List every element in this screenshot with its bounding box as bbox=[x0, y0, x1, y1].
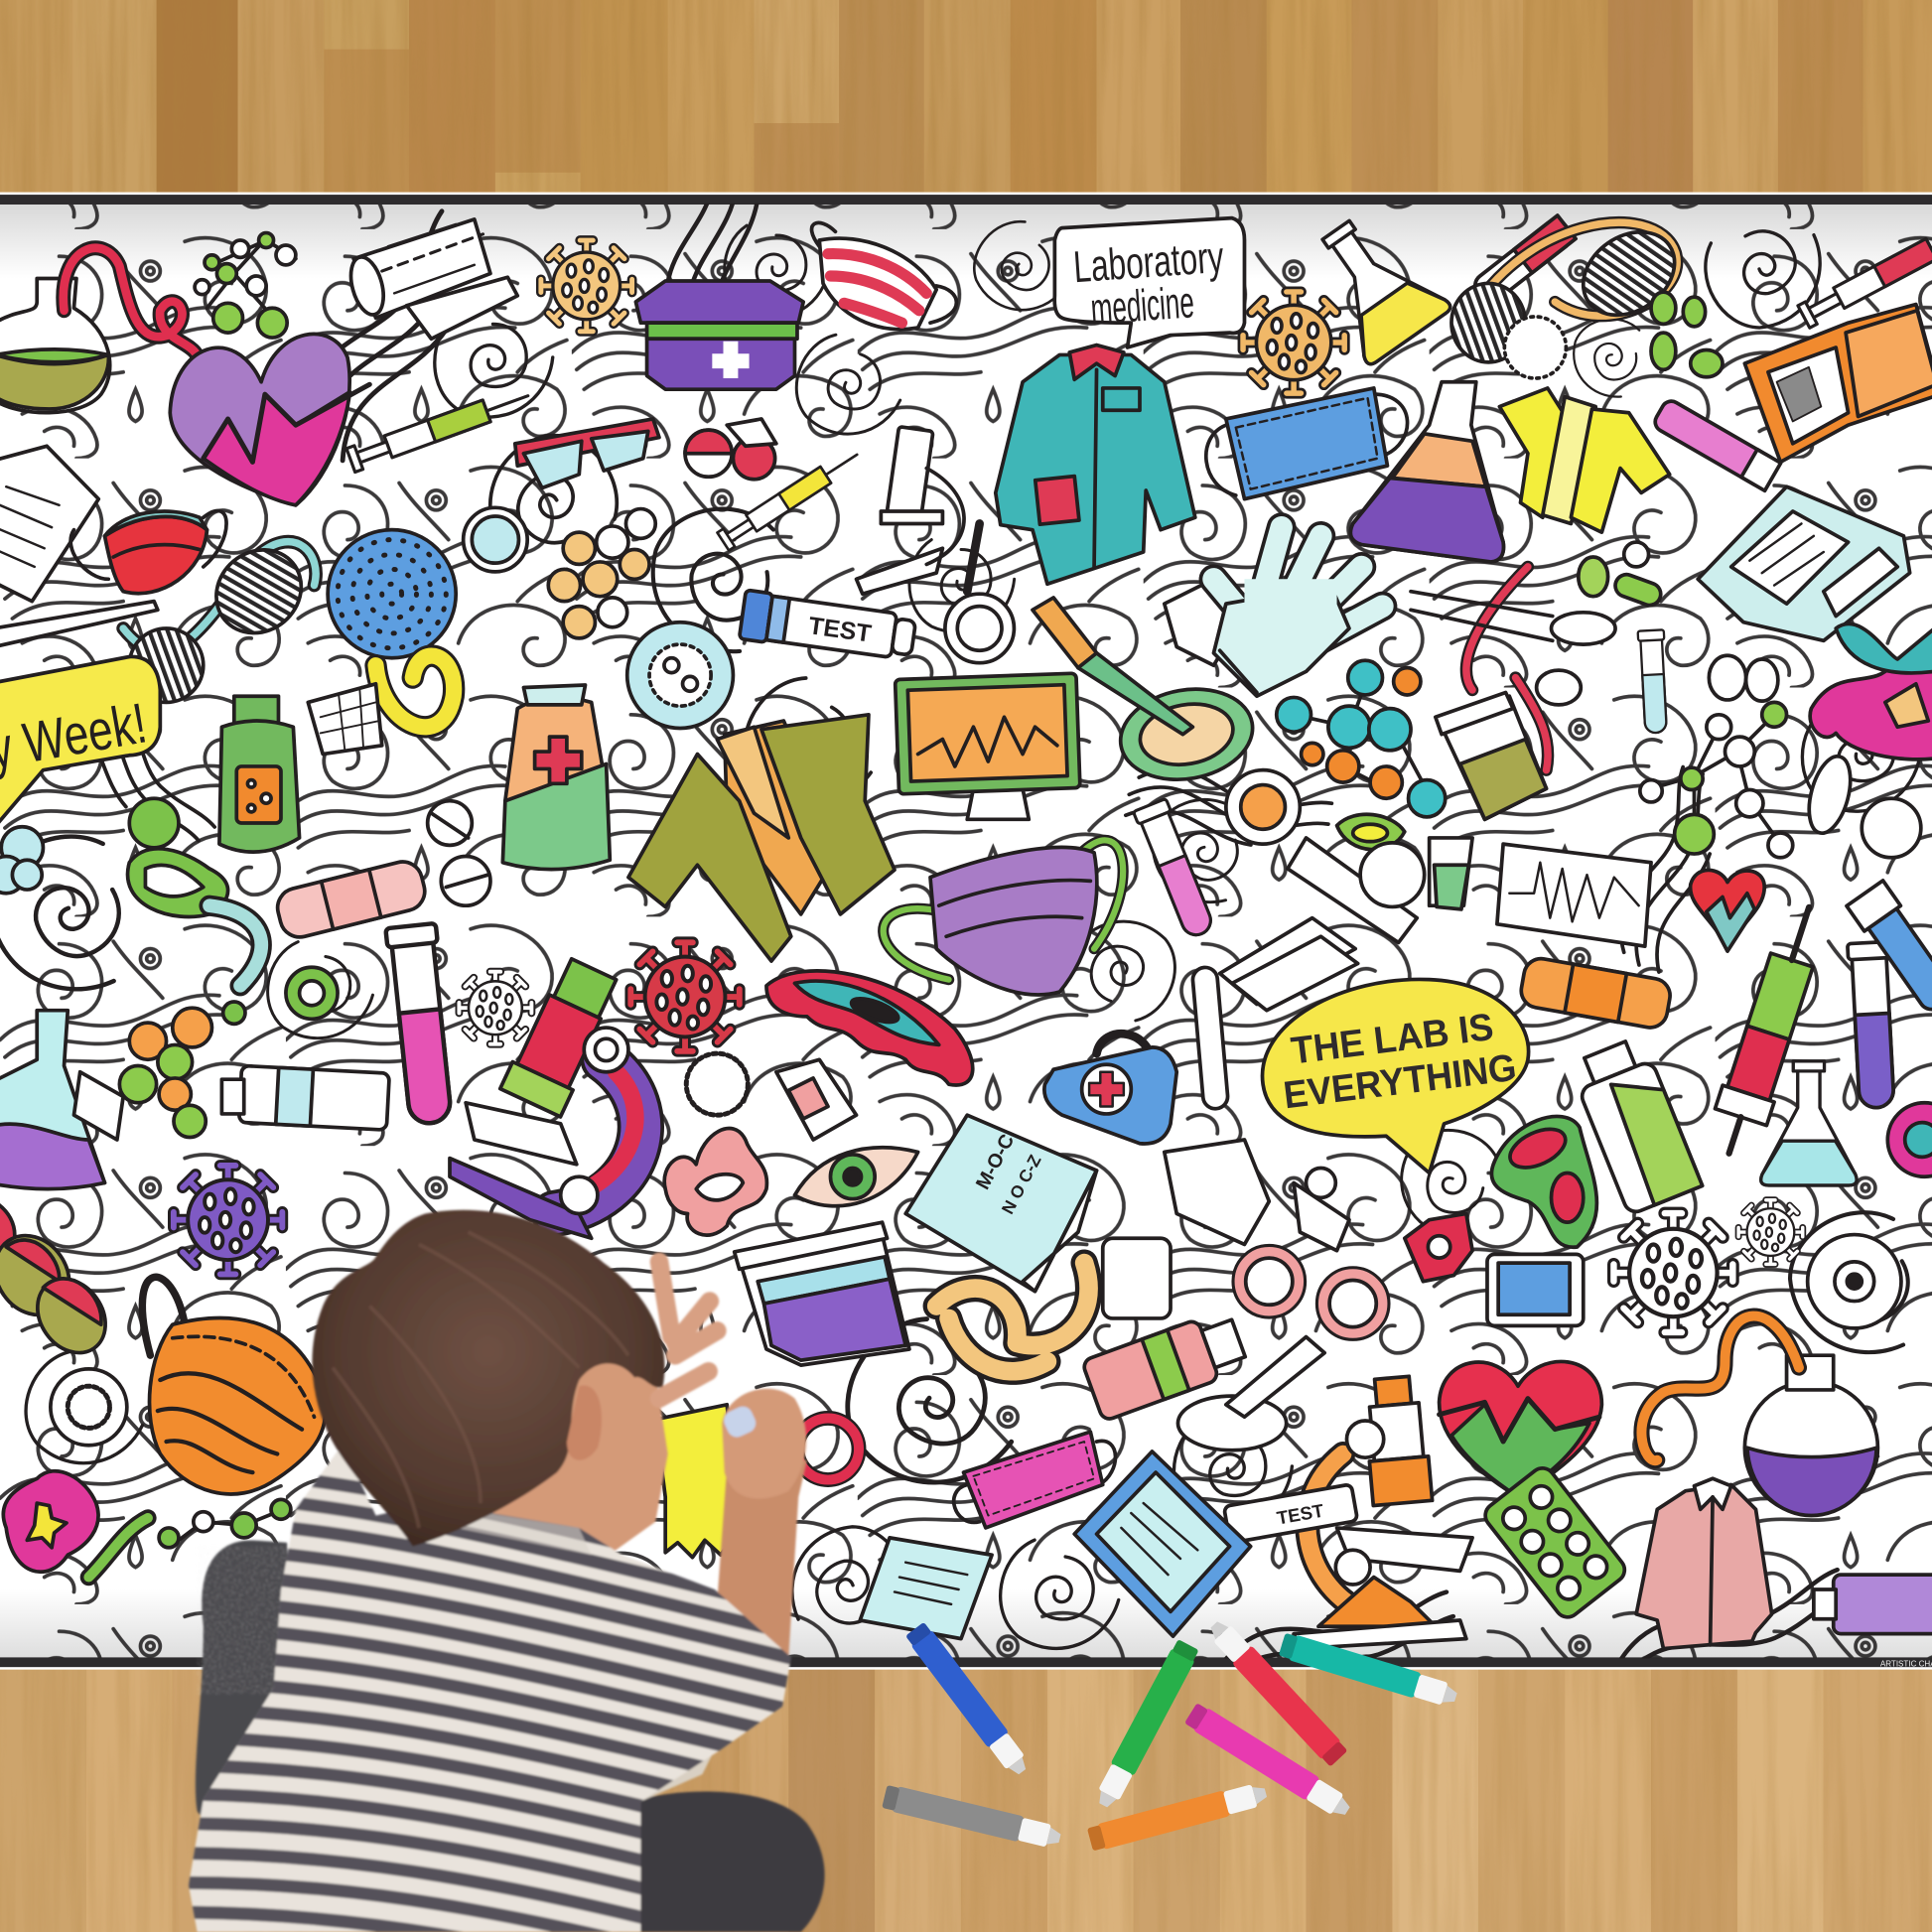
icon: teal lab coat bbox=[996, 345, 1195, 584]
icon: magenta amoeba at right bbox=[1810, 623, 1932, 759]
left knee in grey trousers bbox=[196, 1540, 288, 1836]
icon: teal curl bbox=[209, 905, 261, 986]
right knee in grey trousers bbox=[634, 1792, 825, 1932]
icon: blue tablet device bbox=[1487, 1254, 1584, 1325]
icon: blue clipboard bbox=[1074, 1451, 1251, 1636]
icon: teal test tube bbox=[1638, 629, 1669, 734]
icon: orange and green cell cluster bbox=[73, 1002, 245, 1140]
icon: outline gauge and bag bbox=[1103, 1140, 1349, 1318]
icon: right outline eyeball bbox=[1808, 1235, 1901, 1328]
icon: teal petri dish bbox=[627, 622, 733, 728]
icon: blue dotted sphere bbox=[328, 530, 456, 658]
icon: orange surgical mask bbox=[142, 1277, 326, 1494]
poster sheet bbox=[0, 193, 1932, 1670]
icon: pink amoeba bbox=[664, 1128, 766, 1235]
icon: blue medical bag bbox=[1044, 1034, 1176, 1144]
icon: orange bandage bbox=[1519, 956, 1673, 1031]
marker: green bbox=[1091, 1638, 1200, 1812]
icon: lime syringe bbox=[345, 394, 530, 475]
icon: TEST tube: TEST bbox=[807, 613, 873, 648]
icon: pink spectacles bbox=[1233, 1246, 1389, 1339]
icon: teal and orange molecule bbox=[1277, 660, 1446, 817]
icon: magenta cell right edge bbox=[1887, 1103, 1932, 1176]
icon: teal notes paper bottom bbox=[860, 1538, 992, 1639]
icon: TEST tube bottom bbox=[1224, 1484, 1357, 1543]
icon: main coloured microscope bbox=[450, 955, 640, 1238]
icon: orange virus bbox=[1243, 292, 1344, 393]
icon: magenta amoeba with yellow star bbox=[3, 1471, 148, 1578]
marker: orange bbox=[1087, 1780, 1269, 1853]
icon: purple tube bottom right bbox=[1814, 1575, 1932, 1634]
icon: clipboard at left edge bbox=[0, 446, 98, 602]
icon: red syringe bbox=[1796, 237, 1932, 330]
callout: Laboratory medicine: Laboratory bbox=[1072, 233, 1226, 292]
icon: magnifier outline bbox=[945, 523, 1014, 663]
icon: magenta mask bbox=[954, 1432, 1115, 1528]
icon: pink lab coat bbox=[1636, 1478, 1772, 1649]
icon: light teal disc bbox=[464, 507, 527, 572]
icon: small green bacterium bbox=[1337, 814, 1405, 850]
marker: magenta bbox=[1183, 1702, 1354, 1823]
wood floor: bottom bbox=[0, 1668, 1932, 1932]
icon: light teal gloves bbox=[1165, 527, 1382, 696]
icon: olive scrub top bbox=[628, 715, 895, 961]
icon: blue test tube right edge bbox=[1847, 881, 1932, 1017]
icon: green medicine bottle white bbox=[1569, 1035, 1703, 1215]
icon: pink and green bottle bbox=[1081, 1309, 1249, 1422]
icon: yellow rubber glove bbox=[655, 1405, 740, 1558]
doodle linework background bbox=[0, 204, 1932, 1658]
icon: green bacteria cluster bbox=[1651, 292, 1723, 377]
icon: gauze roll bbox=[345, 219, 517, 339]
icon: red handled scissors bbox=[1411, 567, 1615, 770]
icon: yellow syringe bbox=[717, 446, 863, 550]
icon: white pills right bbox=[1709, 655, 1921, 858]
marker: grey bbox=[882, 1784, 1063, 1852]
icon: pink test tube bbox=[385, 923, 457, 1126]
icon: green pill blister pack bbox=[1480, 1463, 1629, 1622]
icon: green medicine bottle bbox=[219, 696, 300, 852]
icon: green bacterium left bbox=[128, 798, 228, 916]
icon: stacked books bbox=[1220, 918, 1358, 1011]
icon: orange open book bbox=[1744, 305, 1932, 462]
icon: olive specimen jar bbox=[1436, 692, 1547, 819]
icon: round flask with olive liquid bbox=[0, 248, 198, 413]
marker: red bbox=[1204, 1615, 1349, 1768]
marker pens on floor bbox=[882, 1615, 1459, 1853]
icon: purple round flask with orange tube bbox=[1641, 1316, 1877, 1516]
icon: red virus bbox=[630, 942, 740, 1051]
neck and face bbox=[492, 1355, 668, 1559]
icon: outline virus bbox=[459, 972, 531, 1044]
icon: red test tube bbox=[1473, 213, 1579, 290]
callout: Laboratory medicine: medicine bbox=[1089, 278, 1195, 334]
icon: medicine pill bag bbox=[502, 685, 610, 870]
icon: teal medical kit bbox=[1698, 486, 1910, 640]
icon: white pills bbox=[428, 801, 490, 905]
icon: pencil line left edge bbox=[0, 602, 158, 647]
icon: red and white face mask bbox=[812, 222, 956, 330]
icon: purple specimen jar bbox=[735, 1222, 909, 1365]
icon: green atoms chain bbox=[159, 1499, 291, 1548]
icon: grey virus and test card bbox=[686, 1053, 857, 1140]
icon: flask left purple and teal bbox=[0, 1011, 104, 1189]
marker: teal bbox=[1278, 1631, 1459, 1710]
icon: yellow scrub top bbox=[1499, 388, 1670, 532]
icon: red ring bbox=[797, 1418, 859, 1480]
icon: yellow swirl bbox=[376, 656, 454, 727]
icon: teal notes paper with formula: N O C-Z bbox=[998, 1151, 1045, 1217]
icon: tan pretzel bbox=[936, 1263, 1089, 1371]
icon: red amoeba bbox=[1405, 1213, 1472, 1282]
pale belly skin bbox=[640, 1725, 727, 1801]
drawing hand with marker bbox=[721, 1389, 806, 1498]
hair bbox=[312, 1210, 664, 1547]
icon: outline virus bottom right bbox=[1613, 1213, 1732, 1332]
icon: yellow flask bbox=[1320, 218, 1451, 365]
icon: grid pack bbox=[308, 684, 382, 755]
callout: y Week! bbox=[0, 656, 160, 828]
icon: red and white pills bbox=[685, 419, 776, 480]
callout: Laboratory medicine bbox=[1054, 218, 1244, 347]
icon: dotted ball bbox=[1738, 1200, 1803, 1264]
callout: The Lab Is Everything bbox=[1263, 979, 1529, 1173]
icon: green eye bbox=[794, 1148, 918, 1206]
icon: tan cell cluster bbox=[548, 509, 655, 638]
icon: teal and red bacterium bbox=[766, 971, 973, 1085]
icon: broken heart purple and magenta bbox=[170, 334, 369, 505]
icon: purple test tube right bbox=[1848, 941, 1898, 1109]
icon: grey microscope outline bbox=[857, 427, 964, 594]
striped shirt bbox=[173, 1430, 813, 1932]
icon: blue face mask bbox=[1206, 388, 1408, 499]
icon: red and green tube stand bbox=[1704, 898, 1835, 1162]
marker: blue bbox=[904, 1621, 1033, 1779]
wood floor: top bbox=[0, 0, 1932, 193]
colourful doodle items bbox=[0, 202, 1932, 1649]
icon: pink tube diagonal bbox=[1133, 798, 1218, 940]
icon: molecule with green atoms bbox=[195, 233, 296, 338]
icon: purple face mask bbox=[884, 840, 1123, 995]
icon: green swirl circle bbox=[286, 967, 338, 1019]
icon: orange microscope bottom bbox=[1294, 1375, 1472, 1649]
icon: green atom molecule bbox=[1640, 702, 1793, 858]
icon: teal notes paper with formula: M-O-C bbox=[972, 1131, 1019, 1193]
icon: monitor with orange chart bbox=[896, 673, 1080, 819]
icon: teal cloud left bbox=[0, 827, 43, 894]
icon: ECG chart paper bbox=[1497, 844, 1651, 946]
icon: purple first aid box bbox=[635, 281, 803, 389]
icon: petri dish left bbox=[51, 1369, 127, 1446]
icon: red and green heart bbox=[1440, 1361, 1601, 1497]
icon: tan virus bbox=[541, 240, 632, 332]
icon: red surgical mask bbox=[70, 510, 226, 594]
icon: pipette and dish bottom bbox=[1177, 1337, 1324, 1450]
icon: white bottle laying bbox=[221, 1065, 389, 1130]
icon: conical flask purple and orange bbox=[1350, 382, 1503, 562]
icon: green and white capsules bbox=[1579, 542, 1664, 609]
open hand with fingers bbox=[659, 1262, 717, 1399]
ear bbox=[567, 1386, 602, 1460]
icon: pink capsule tube bbox=[1652, 398, 1781, 490]
icon: red glasses bbox=[515, 419, 659, 487]
icon: teal DNA helix bbox=[123, 533, 318, 702]
icon: white syringe and green tube bbox=[1288, 838, 1472, 942]
icon: orange disc bbox=[1226, 770, 1300, 844]
icon: TEST tube bottom: TEST bbox=[1275, 1500, 1325, 1529]
icon: teal flask right bbox=[1761, 1061, 1857, 1185]
icon: thermometer bbox=[1191, 966, 1229, 1110]
icon: purple spiked virus bbox=[174, 1166, 282, 1274]
icon: TEST tube bbox=[739, 590, 916, 662]
icon: tan DNA helix bbox=[1451, 215, 1691, 378]
callout: The Lab Is Everything: EVERYTHING bbox=[1281, 1046, 1519, 1117]
icon: pipette and petri dish bbox=[1033, 598, 1260, 789]
icon: green and red bacteria bbox=[1491, 1116, 1596, 1247]
callout: The Lab Is Everything: THE LAB IS bbox=[1289, 1006, 1496, 1073]
icon: red green capsules left edge bbox=[0, 1201, 119, 1366]
icon: teal notes paper with formula bbox=[905, 1115, 1097, 1292]
icon: pink bandage bbox=[273, 858, 429, 941]
drawing arm bbox=[717, 1460, 807, 1657]
icon: small red heart bbox=[1691, 870, 1764, 951]
boy drawing on poster bbox=[173, 1210, 825, 1932]
